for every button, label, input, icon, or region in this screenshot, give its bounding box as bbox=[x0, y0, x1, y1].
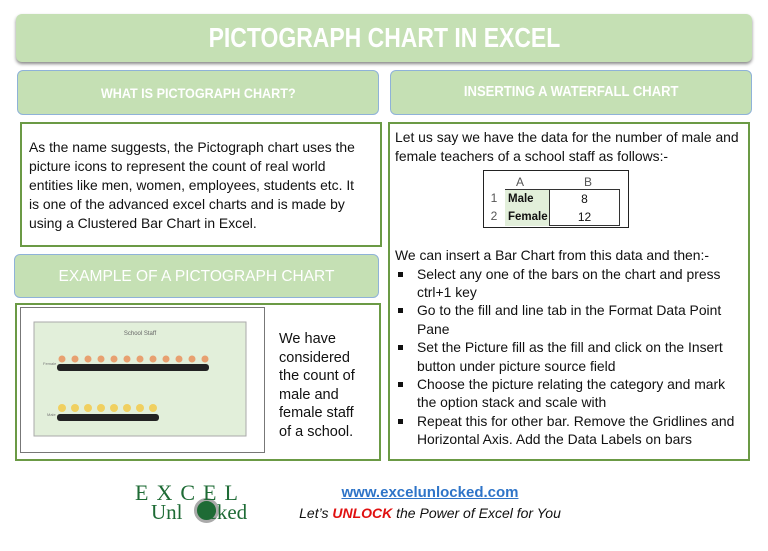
data table bbox=[483, 170, 629, 228]
icon: lock bbox=[194, 498, 219, 523]
data table: 8 bbox=[581, 192, 588, 206]
data table: 12 bbox=[578, 210, 591, 224]
logo: EXCEL bbox=[135, 480, 246, 505]
bullet list: Set the Picture fill as the fill and click on the Insert button under picture source field bbox=[417, 339, 723, 374]
chart image: School Staff bbox=[124, 331, 156, 337]
bullet list: Go to the fill and line tab in the Format Data Point Pane bbox=[417, 302, 721, 337]
bullet list: Select any one of the bars on the chart and press ctrl+1 key bbox=[417, 266, 720, 300]
data table: 2 bbox=[491, 209, 497, 223]
heading: example: EXAMPLE OF A PICTOGRAPH CHART bbox=[59, 268, 334, 285]
logo bbox=[135, 480, 247, 524]
panel: definition text bbox=[20, 122, 382, 247]
bullet list: We can insert a Bar Chart from this data and then:- bbox=[395, 247, 709, 263]
chart image bbox=[20, 307, 265, 453]
bullet list: Choose the picture relating the category and mark the option stack and scale with bbox=[417, 376, 725, 410]
panel: example bbox=[15, 303, 381, 461]
intro text: Let us say we have the data for the number of male and female teachers of a school staff as follows:- bbox=[395, 129, 739, 164]
panel: definition text: As the name suggests, the Pictograph chart uses the picture icons to represent the count of real world entities like men, women, employees, students etc. It is one of the advanced excel charts and is made by using a Clustered Bar Chart in Excel. bbox=[29, 139, 355, 231]
logo: Unl cked bbox=[151, 500, 247, 524]
chart image: Female bbox=[43, 361, 57, 366]
heading: what is pictograph chart bbox=[17, 70, 379, 115]
url: www.excelunlocked.com bbox=[341, 484, 518, 501]
data table: B bbox=[584, 175, 592, 189]
bullet list: Repeat this for other bar. Remove the Gridlines and Horizontal Axis. Add the Data Labels on bars bbox=[417, 413, 734, 447]
example description: We have considered the count of male and female staff of a school. bbox=[279, 331, 355, 440]
tagline: Let’s UNLOCK the Power of Excel for You bbox=[299, 505, 561, 521]
chart image: Male bbox=[47, 412, 56, 417]
data table: Female bbox=[508, 211, 548, 223]
data table: 1 bbox=[491, 191, 497, 205]
data table: A bbox=[516, 175, 524, 189]
heading: example bbox=[14, 254, 379, 298]
heading: what is pictograph chart: WHAT IS PICTOGRAPH CHART? bbox=[101, 85, 295, 101]
title bbox=[16, 14, 752, 62]
panel: steps bbox=[388, 122, 750, 461]
title: PICTOGRAPH CHART IN EXCEL bbox=[208, 22, 560, 53]
data table: Male bbox=[508, 193, 534, 205]
bullet list bbox=[395, 247, 734, 447]
heading: inserting a waterfall chart: INSERTING A WATERFALL CHART bbox=[464, 84, 678, 100]
heading: inserting a waterfall chart bbox=[390, 70, 752, 115]
